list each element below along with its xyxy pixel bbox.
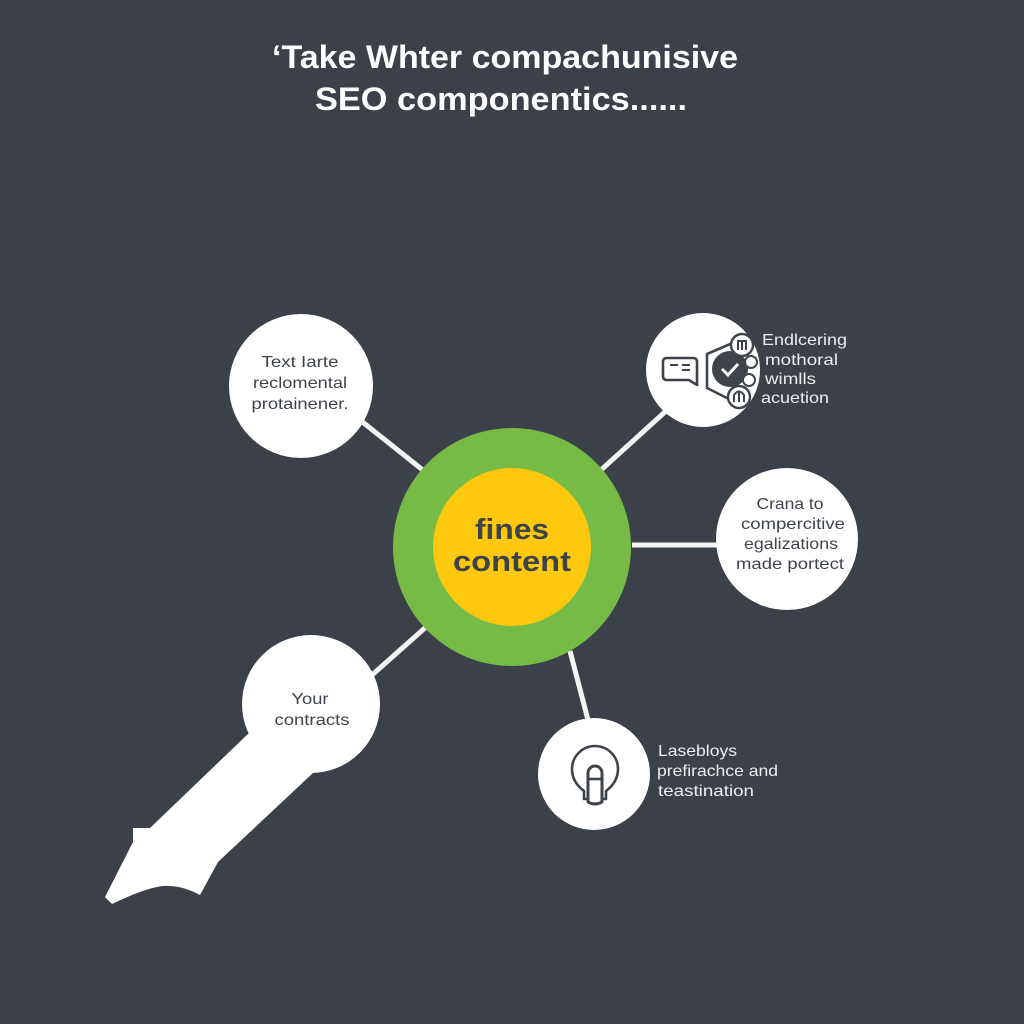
icon: chat bubble bbox=[663, 358, 697, 385]
node: right: compercitive bbox=[741, 516, 845, 533]
text: top right label: Endlcering bbox=[762, 332, 847, 349]
title: SEO componentics...... bbox=[315, 81, 687, 117]
node: bottom left with arrow: contracts bbox=[274, 712, 350, 729]
node: bottom left with arrow bbox=[105, 635, 380, 904]
text: top right label: mothoral bbox=[765, 352, 838, 369]
node: bottom left with arrow: Your bbox=[292, 691, 329, 708]
central hub bbox=[393, 428, 631, 666]
text: top right label bbox=[761, 332, 847, 407]
node: top left bbox=[229, 314, 373, 458]
title: ‘Take Whter compachunisive bbox=[272, 39, 738, 75]
text: top right label: wimlls bbox=[764, 371, 816, 388]
node: top left: reclomental bbox=[253, 375, 347, 392]
central hub: fines bbox=[475, 514, 549, 546]
node: right: made portect bbox=[736, 556, 845, 573]
node: bottom right with bulb bbox=[538, 718, 778, 830]
icon: light bulb bbox=[572, 746, 618, 804]
title bbox=[272, 39, 738, 117]
text: bottom right label: prefirachce and bbox=[657, 763, 778, 780]
icon: shield with check and badges bbox=[707, 334, 757, 408]
node: right bbox=[716, 468, 858, 610]
node: top right with icons bbox=[646, 313, 847, 427]
node: right: Crana to bbox=[756, 496, 824, 513]
node: top left: Text Iarte bbox=[262, 354, 339, 371]
node: right: egalizations bbox=[744, 536, 838, 553]
text: bottom right label bbox=[657, 743, 778, 800]
text: bottom right label: Lasebloys bbox=[658, 743, 737, 760]
central hub: content bbox=[453, 546, 571, 578]
connector lines bbox=[360, 411, 720, 720]
text: top right label: acuetion bbox=[761, 390, 829, 407]
node: top left: protainener. bbox=[252, 396, 348, 413]
text: bottom right label: teastination bbox=[658, 783, 754, 800]
